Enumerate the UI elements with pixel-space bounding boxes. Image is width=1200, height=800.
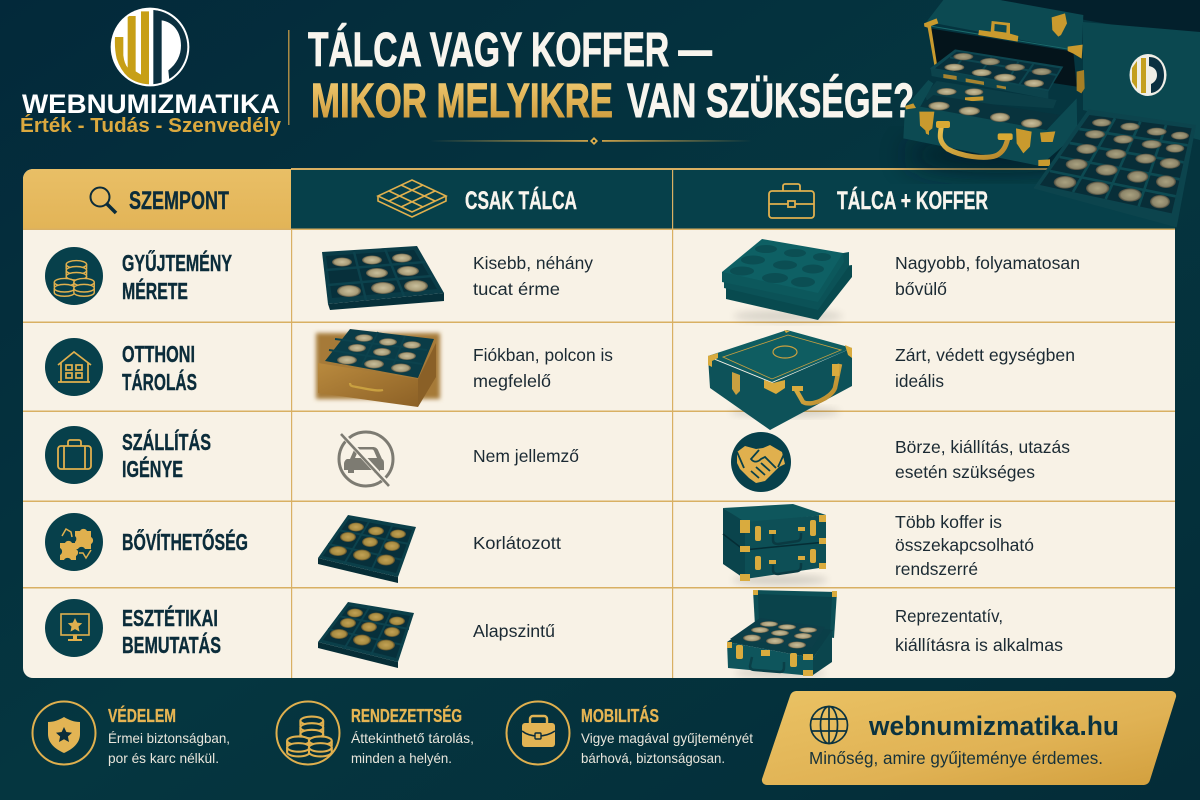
feature: mobilitás: [506, 702, 753, 766]
row: esztétikai bemutatás: BEMUTATÁS: [122, 631, 221, 658]
row: bővíthetőség: Több koffer is: [895, 512, 1002, 532]
header: csak tálca: [291, 169, 672, 229]
row: otthoni tárolás: OTTHONI: [122, 341, 195, 367]
row: esztétikai bemutatás: kiállításra is alkalmas: [895, 635, 1063, 655]
row: gyűjtemény mérete: Kisebb, néhány: [473, 253, 593, 273]
picture: open suitcase with trays, top right: [903, 0, 1200, 227]
row: gyűjtemény mérete: bővülő: [895, 279, 947, 299]
coin tray in front: [1033, 109, 1196, 227]
suitcase body and inner trays: [903, 0, 1085, 166]
row: bővíthetőség: Korlátozott: [473, 533, 561, 553]
picture: two stacked cases: [723, 504, 828, 585]
row: otthoni tárolás: [45, 329, 1075, 430]
icon: shield: [32, 702, 96, 764]
picture: closed case: [708, 330, 852, 430]
icon: suitcase: [45, 426, 103, 484]
website banner: Minőség, amire gyűjteménye érdemes.: [809, 748, 1103, 768]
feature: védelem: por és karc nélkül.: [108, 750, 219, 766]
icon: no car: [339, 432, 393, 486]
row: otthoni tárolás: megfelelő: [473, 371, 551, 391]
title: TÁLCA VAGY KOFFER —: [308, 23, 712, 77]
title ornament: [430, 137, 752, 145]
row: szállítás igénye: [45, 426, 1070, 492]
row: szállítás igénye: SZÁLLÍTÁS: [122, 428, 211, 455]
header: szempont: SZEMPONT: [129, 187, 229, 215]
icon: monitor with star: [45, 599, 103, 657]
logo: [20, 8, 282, 137]
row: gyűjtemény mérete: [45, 239, 1080, 322]
icon: tray: [378, 180, 446, 217]
row: gyűjtemény mérete: GYŰJTEMÉNY: [122, 249, 232, 276]
title: VAN SZÜKSÉGE?: [627, 74, 914, 128]
row: bővíthetőség: [45, 504, 1034, 585]
picture: silver coin tray: [322, 246, 444, 310]
icon: puzzle: [45, 513, 103, 571]
feature: rendezettség: minden a helyén.: [351, 750, 452, 766]
row: otthoni tárolás: TÁROLÁS: [122, 368, 197, 395]
row: gyűjtemény mérete: Nagyobb, folyamatosan: [895, 253, 1080, 273]
feature: mobilitás: MOBILITÁS: [581, 705, 659, 726]
feature: védelem: VÉDELEM: [108, 705, 176, 726]
icon: briefcase: [769, 184, 814, 218]
icon: globe: [810, 706, 848, 744]
row: szállítás igénye: IGÉNYE: [122, 455, 183, 482]
picture: tray in wooden drawer: [316, 329, 440, 407]
row: bővíthetőség: BŐVÍTHETŐSÉG: [122, 528, 248, 555]
logo tagline: Érték - Tudás - Szenvedély: [20, 114, 282, 137]
row: esztétikai bemutatás: Reprezentatív,: [895, 606, 1003, 626]
icon: magnifier: [90, 188, 116, 213]
feature: rendezettség: RENDEZETTSÉG: [351, 705, 462, 726]
header: tálca + koffer: TÁLCA + KOFFER: [837, 186, 988, 215]
row: esztétikai bemutatás: [45, 590, 1063, 677]
icon: handshake: [731, 432, 791, 492]
header: tálca + koffer: [672, 169, 1175, 229]
feature: védelem: Érmei biztonságban,: [108, 730, 230, 746]
header: csak tálca: CSAK TÁLCA: [465, 186, 577, 215]
feature: rendezettség: [276, 702, 474, 766]
row: szállítás igénye: esetén szükséges: [895, 462, 1035, 482]
picture: gold coin tray: [318, 515, 416, 583]
row: otthoni tárolás: ideális: [895, 371, 944, 391]
feature: védelem: [32, 702, 230, 766]
row: esztétikai bemutatás: ESZTÉTIKAI: [122, 604, 218, 631]
picture: stacked empty trays: [722, 239, 852, 322]
header: szempont: [23, 169, 291, 229]
row: gyűjtemény mérete: tucat érme: [473, 279, 560, 299]
feature: mobilitás: bárhová, biztonságosan.: [581, 750, 725, 766]
icon: briefcase: [506, 702, 570, 764]
title: MIKOR MELYIKRE: [311, 75, 613, 128]
icon: house: [45, 338, 103, 396]
row: otthoni tárolás: Zárt, védett egységben: [895, 345, 1075, 365]
row: esztétikai bemutatás: Alapszintű: [473, 621, 555, 641]
feature: mobilitás: Vigye magával gyűjteményét: [581, 730, 753, 746]
website banner: [762, 691, 1176, 785]
row: gyűjtemény mérete: MÉRETE: [122, 277, 188, 304]
open lid with logo: [1083, 22, 1200, 140]
comparison table: [23, 168, 1175, 678]
logo wordmark: WEBNUMIZMATIKA: [22, 89, 280, 119]
row: szállítás igénye: Börze, kiállítás, utazás: [895, 437, 1070, 457]
website banner: webnumizmatika.hu: [868, 711, 1119, 741]
icon: coins: [45, 247, 103, 305]
icon: coins: [276, 702, 340, 764]
row: bővíthetőség: rendszerré: [895, 559, 978, 579]
row: szállítás igénye: Nem jellemző: [473, 446, 579, 466]
row: otthoni tárolás: Fiókban, polcon is: [473, 345, 613, 365]
title: [308, 23, 914, 128]
picture: gold coin tray: [318, 602, 414, 668]
picture: open case with tray: [727, 590, 837, 677]
feature: rendezettség: Áttekinthető tárolás,: [351, 730, 474, 746]
row: bővíthetőség: összekapcsolható: [895, 535, 1034, 555]
